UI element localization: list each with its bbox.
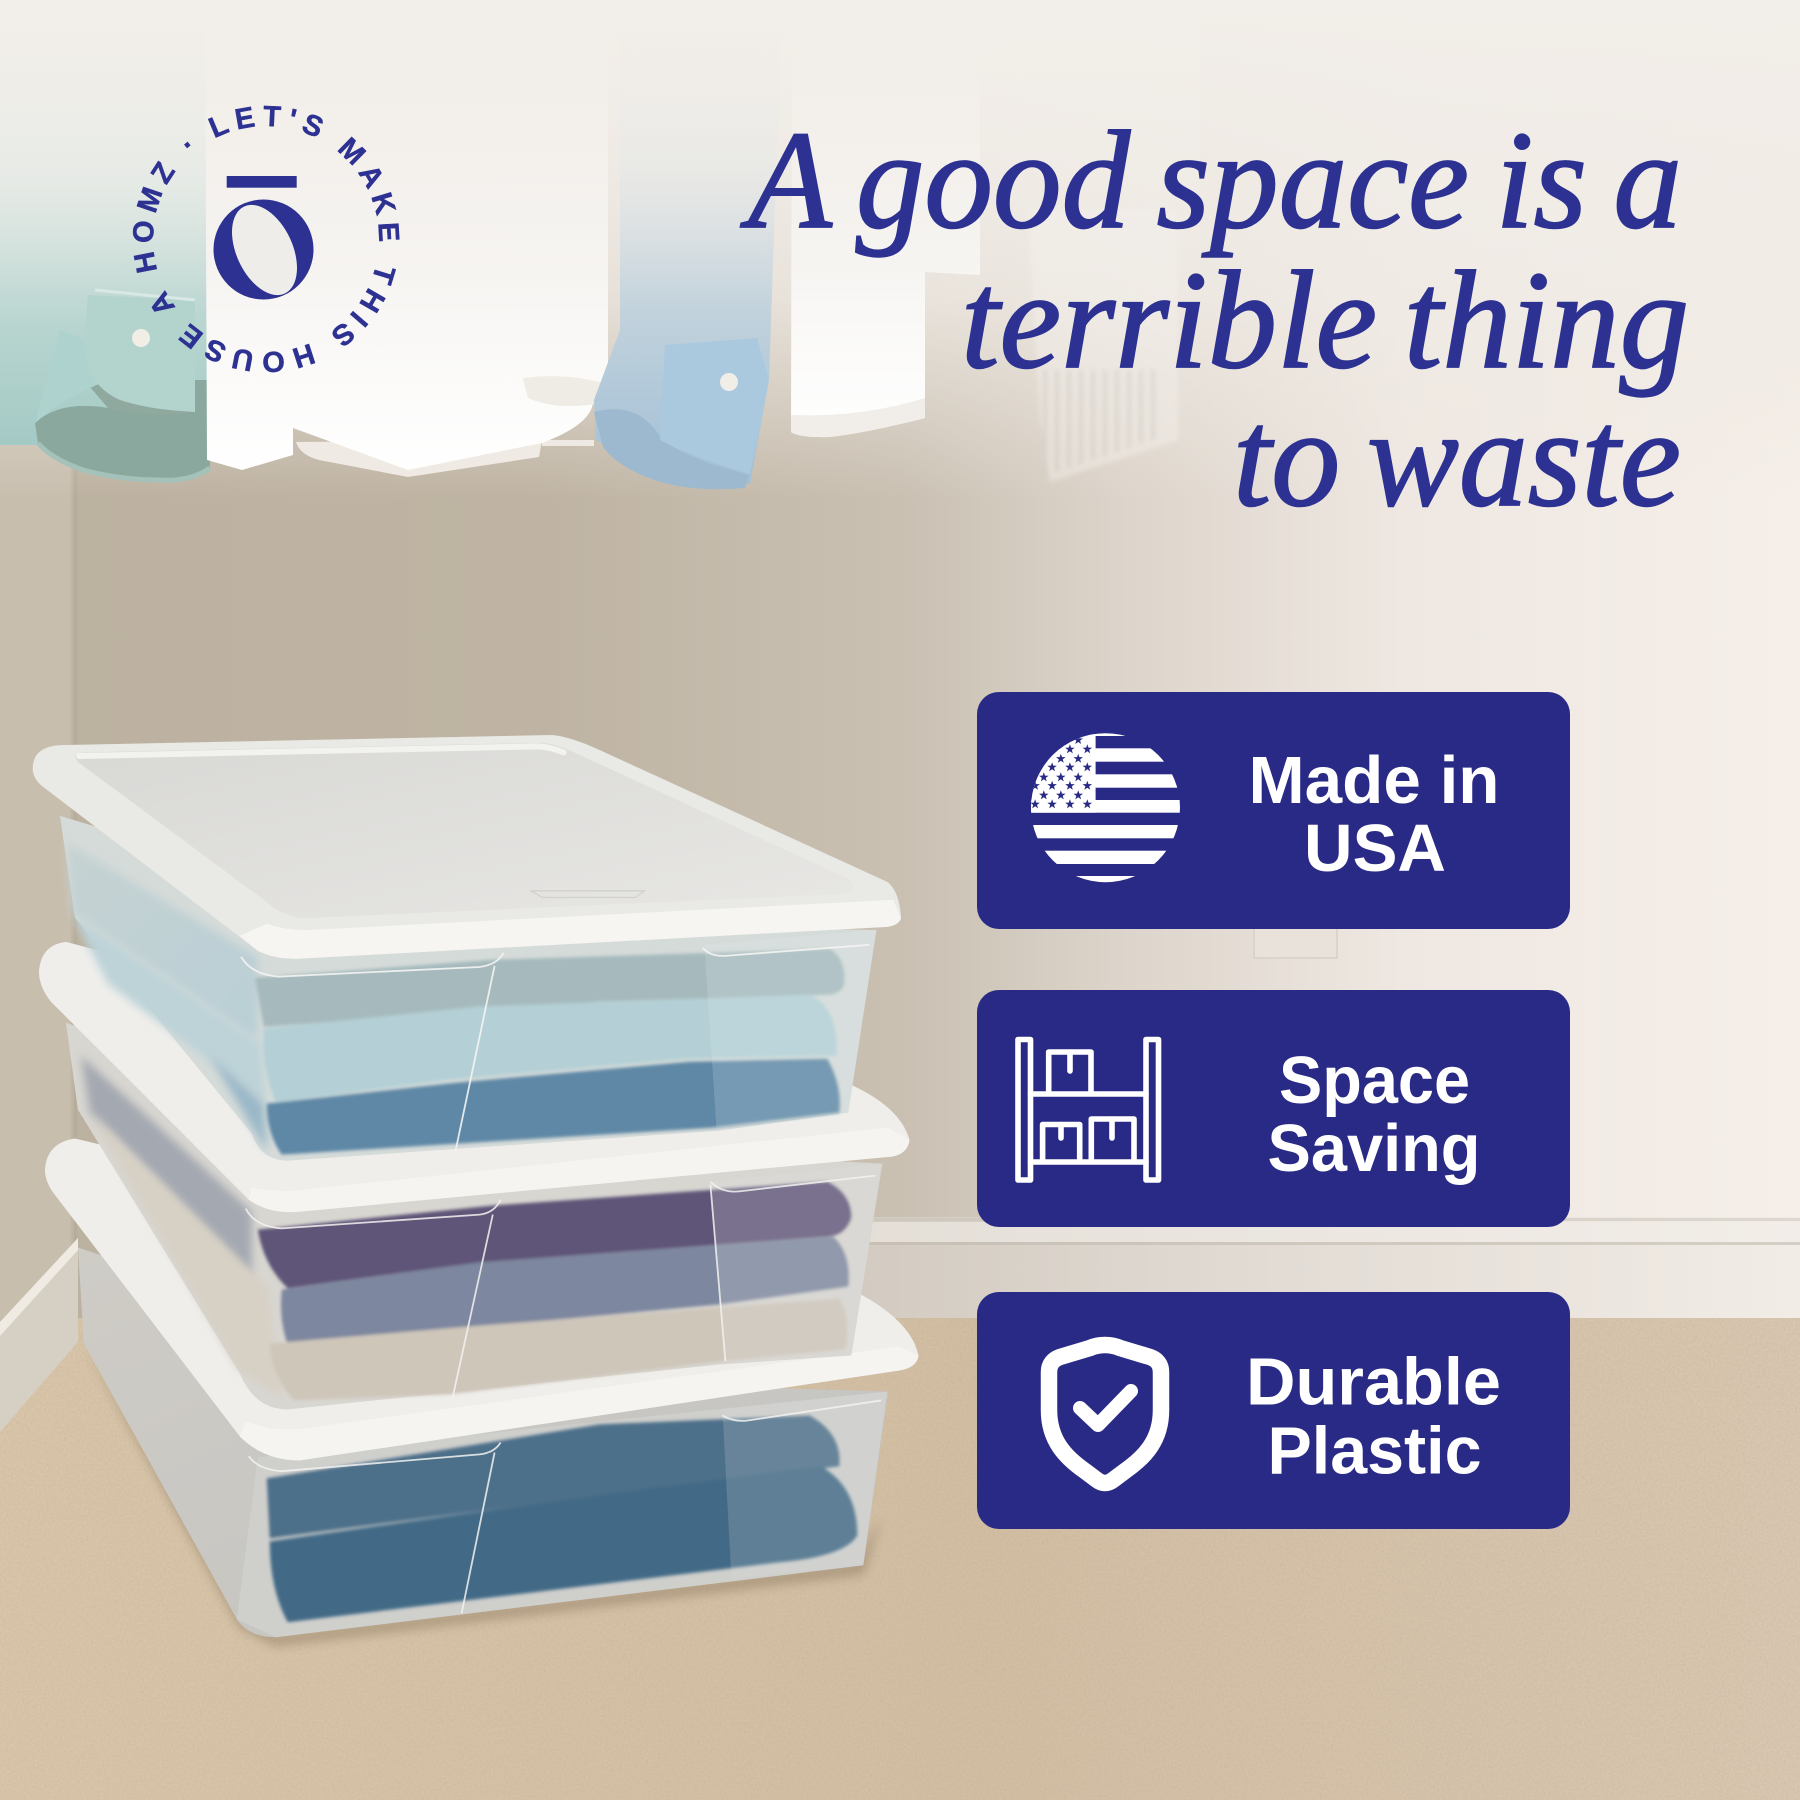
- label: Saving: [1268, 1111, 1480, 1186]
- brand logo badge: [132, 106, 400, 372]
- headline: terrible thing: [961, 243, 1689, 398]
- icon: shield with check: [1049, 1345, 1161, 1483]
- lid: [45, 1138, 918, 1460]
- body: [66, 1023, 882, 1409]
- headline: A good space is a: [740, 103, 1682, 258]
- label: USA: [1304, 811, 1446, 886]
- grey blue blanket: [281, 1237, 849, 1345]
- headline: [740, 103, 1689, 536]
- clip lines: [246, 1176, 875, 1397]
- floor contact shadow: [84, 1343, 881, 1646]
- storage box stack: [33, 735, 918, 1646]
- lid front lip: [240, 900, 901, 959]
- top wash: [0, 0, 1800, 500]
- icon: US flag circle: [1030, 733, 1181, 883]
- circular tagline: LET'S MAKE THIS HOUSE A HOMZ ·: [132, 106, 400, 372]
- lid rim: [33, 735, 901, 959]
- frost: [710, 1164, 881, 1363]
- frost: [722, 1391, 887, 1578]
- label: Durable: [1246, 1344, 1501, 1420]
- body: [60, 816, 876, 1161]
- clip lines: [249, 1400, 881, 1613]
- card: made in USA: [977, 692, 1570, 929]
- beige blanket: [270, 1299, 847, 1400]
- hanging shirts: [0, 0, 1200, 489]
- shirt: white sleeve: [791, 0, 980, 437]
- label: [1268, 1043, 1480, 1186]
- shirt: blue denim: [594, 0, 782, 489]
- blue blanket: [267, 1059, 840, 1155]
- frost: [704, 930, 876, 1128]
- body: [78, 1248, 888, 1637]
- light blue blanket: [263, 995, 837, 1102]
- dark blue blankets: [267, 1415, 857, 1622]
- label: [1246, 1344, 1501, 1488]
- label: Space: [1279, 1043, 1470, 1118]
- soft fade at top of clothes: [0, 0, 1200, 300]
- lid label mark: [531, 891, 644, 897]
- baseboard: [860, 1217, 1800, 1318]
- grey blue blanket: [255, 949, 844, 1155]
- label: [1248, 743, 1500, 886]
- shirt: white: [205, 0, 609, 477]
- headline: to waste: [1233, 381, 1681, 536]
- lid: [39, 942, 909, 1212]
- box 2: middle: [39, 942, 909, 1409]
- logo mark: o with macron: [214, 176, 314, 305]
- card: space saving: [977, 990, 1570, 1227]
- purple blanket: [258, 1182, 851, 1400]
- scarf: [1028, 210, 1178, 482]
- carpet floor: [0, 1318, 1800, 1800]
- clip lines: [241, 945, 869, 1150]
- label: Plastic: [1268, 1414, 1482, 1488]
- card: durable plastic: [977, 1292, 1570, 1529]
- left baseboard: [0, 1238, 78, 1432]
- lid panel highlight: [79, 746, 564, 756]
- wall outlet plate: [1254, 924, 1337, 958]
- icon: shelf with boxes: [1018, 1040, 1158, 1180]
- shirt: mint: [0, 0, 215, 480]
- box 1: top: [33, 735, 901, 1161]
- box 3: bottom: [45, 1138, 918, 1637]
- label: Made in: [1248, 743, 1500, 818]
- lid top panel: [75, 743, 854, 918]
- left side wall: [0, 0, 74, 1420]
